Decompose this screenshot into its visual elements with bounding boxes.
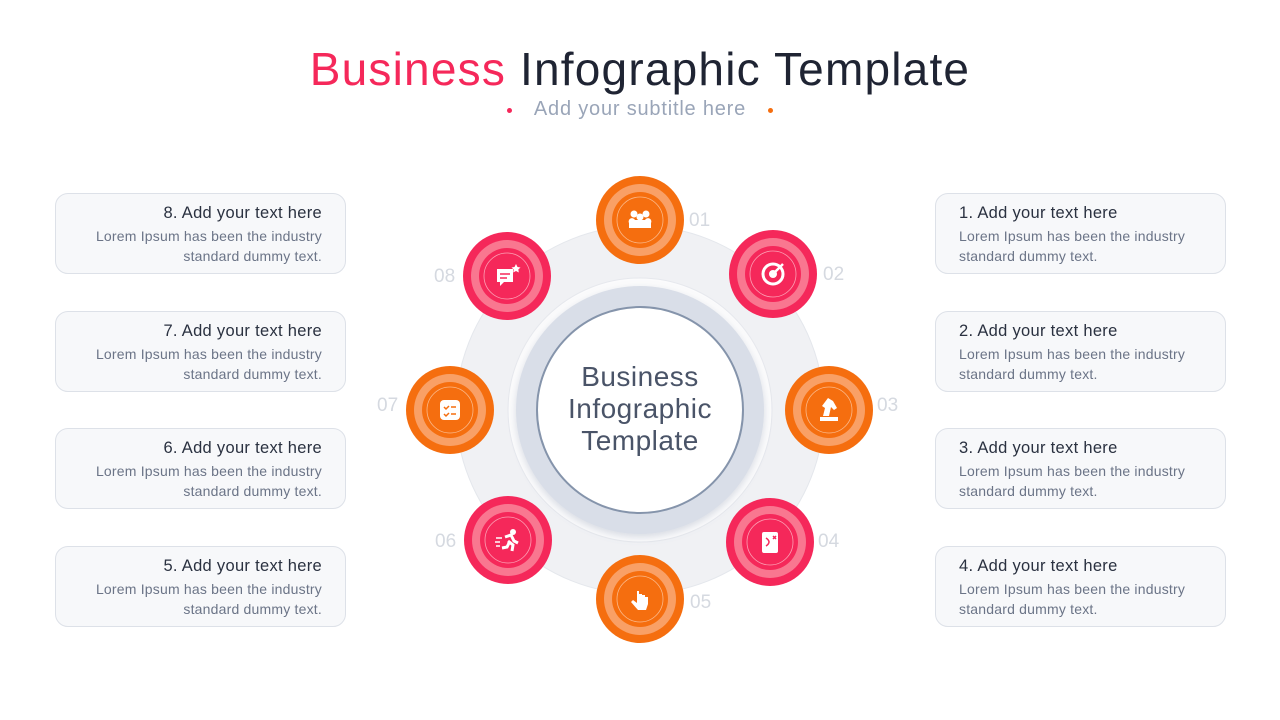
center circle: Template [581, 425, 699, 456]
number labels: 04 [818, 531, 840, 552]
dot right [768, 108, 773, 113]
box 6 [55, 428, 346, 509]
node 02 [729, 230, 817, 318]
node 01 [596, 176, 684, 264]
box 7: standard dummy text. [183, 366, 322, 382]
box 1 [935, 193, 1226, 274]
box 2: Lorem Ipsum has been the industry [959, 346, 1185, 362]
right boxes [935, 193, 1226, 627]
number labels [377, 210, 898, 613]
number labels: 06 [435, 531, 456, 552]
box 8 [55, 193, 346, 274]
box 4: standard dummy text. [959, 601, 1098, 617]
box 3: 3. Add your text here [959, 439, 1118, 457]
box 4: 4. Add your text here [959, 557, 1118, 575]
inner white ring [508, 278, 772, 542]
box 2: standard dummy text. [959, 366, 1098, 382]
box 1: standard dummy text. [959, 248, 1098, 264]
node 08 [463, 232, 551, 320]
node 07 [406, 366, 494, 454]
number labels: 02 [823, 264, 844, 285]
number labels: 05 [690, 592, 711, 613]
box 5: standard dummy text. [183, 601, 322, 617]
box 6: Lorem Ipsum has been the industry [96, 463, 322, 479]
node 03 [785, 366, 873, 454]
box 8: standard dummy text. [183, 248, 322, 264]
box 2: 2. Add your text here [959, 322, 1118, 340]
center circle: Infographic [568, 393, 712, 424]
number labels: 01 [689, 210, 710, 231]
box 2 [935, 311, 1226, 392]
number labels: 03 [877, 395, 898, 416]
box 7: Lorem Ipsum has been the industry [96, 346, 322, 362]
center circle [537, 307, 743, 513]
node 04 [726, 498, 814, 586]
center circle: Business [581, 361, 699, 392]
box 5 [55, 546, 346, 627]
box 6: standard dummy text. [183, 483, 322, 499]
box 5: 5. Add your text here [163, 557, 322, 575]
node 05 [596, 555, 684, 643]
box 7: 7. Add your text here [163, 322, 322, 340]
box 6: 6. Add your text here [163, 439, 322, 457]
box 8: Lorem Ipsum has been the industry [96, 228, 322, 244]
number labels: 07 [377, 395, 398, 416]
box 4 [935, 546, 1226, 627]
left boxes [55, 193, 346, 627]
box 5: Lorem Ipsum has been the industry [96, 581, 322, 597]
box 3: Lorem Ipsum has been the industry [959, 463, 1185, 479]
title: Business Infographic Template [310, 43, 970, 95]
box 7 [55, 311, 346, 392]
box 3: standard dummy text. [959, 483, 1098, 499]
subtitle: Add your subtitle here [534, 98, 746, 120]
box 1: Lorem Ipsum has been the industry [959, 228, 1185, 244]
outer grey ring [456, 226, 824, 594]
dot left [507, 108, 512, 113]
box 4: Lorem Ipsum has been the industry [959, 581, 1185, 597]
node 06 [464, 496, 552, 584]
number labels: 08 [434, 266, 455, 287]
box 1: 1. Add your text here [959, 204, 1118, 222]
box 3 [935, 428, 1226, 509]
box 8: 8. Add your text here [163, 204, 322, 222]
